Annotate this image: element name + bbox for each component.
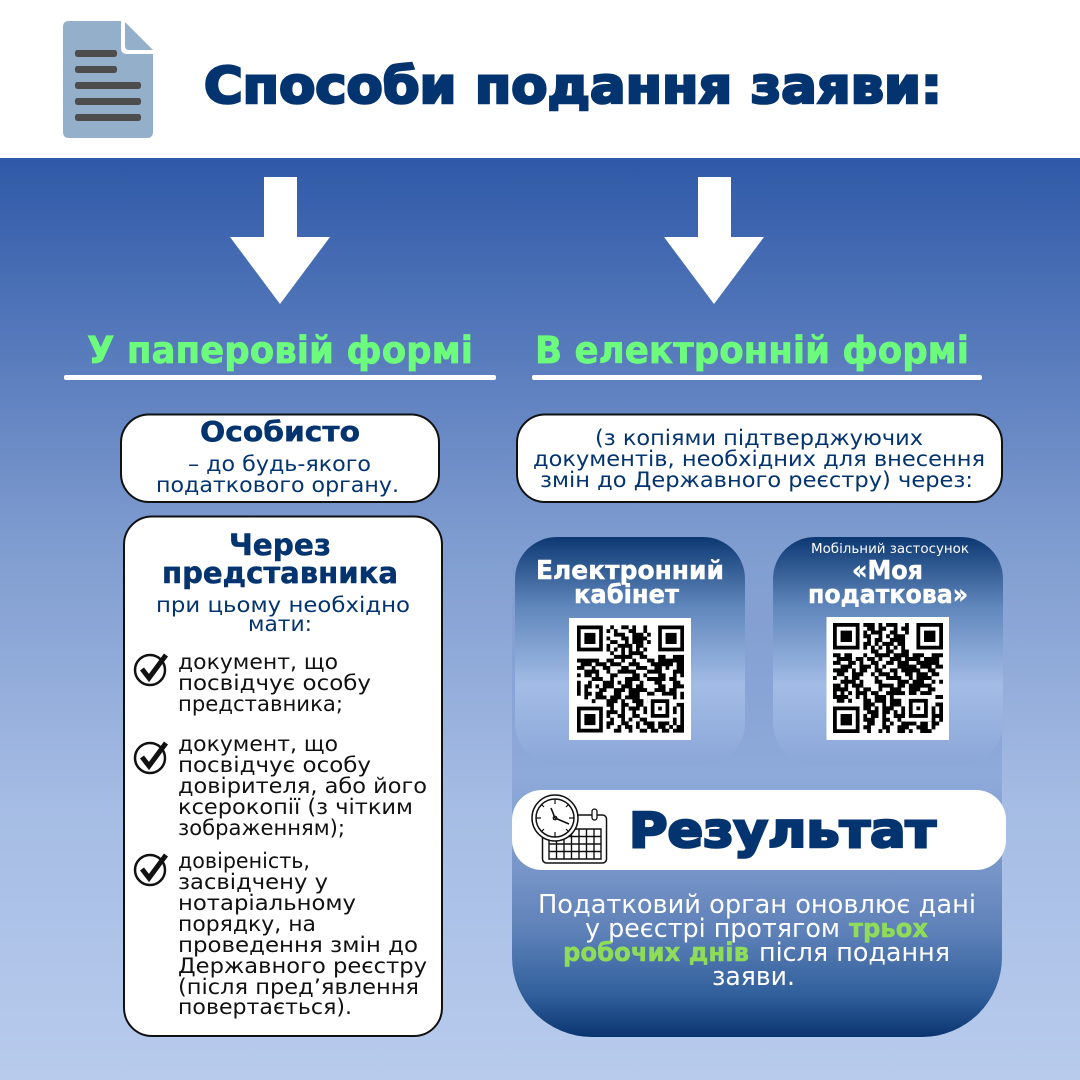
arrow: right column xyxy=(664,177,764,304)
panel: in person xyxy=(121,414,439,502)
item 2: зображенням); xyxy=(178,816,345,841)
item 1 xyxy=(178,650,371,717)
item 3: Державного реєстру xyxy=(178,954,427,979)
panel: via representative xyxy=(124,516,442,1036)
representative heading xyxy=(156,528,410,637)
icon: document xyxy=(63,21,153,138)
item 3: довіреність, xyxy=(178,849,310,874)
item 1: посвідчує особу xyxy=(178,671,371,696)
panel: electronic cabinet: кабінет xyxy=(574,580,679,610)
heading: paper form: У паперовій формі xyxy=(87,329,473,372)
panel: in person: податкового органу. xyxy=(156,473,399,498)
result description: після подання xyxy=(759,938,950,968)
item 3: проведення змін до xyxy=(178,933,418,958)
item 2: ксерокопії (з чітким xyxy=(178,795,413,820)
result description xyxy=(538,890,976,992)
item 2: документ, що xyxy=(178,732,338,757)
item 3 xyxy=(178,849,427,1020)
item 1: документ, що xyxy=(178,650,338,675)
icon: check 3 xyxy=(135,855,166,885)
representative heading: Через xyxy=(229,528,331,562)
result description: заяви. xyxy=(712,962,795,992)
item 1: представника; xyxy=(178,692,343,717)
result description: Податковий орган оновлює дані xyxy=(538,890,976,920)
panel: electronic cabinet: Електронний xyxy=(536,556,724,586)
item 2: довірителя, або його xyxy=(178,774,427,799)
panel: in person: Особисто xyxy=(200,416,360,448)
result heading: Результат xyxy=(629,803,936,859)
representative heading: при цьому необхідно xyxy=(156,593,410,618)
heading: electronic form: В електронній формі xyxy=(535,329,969,372)
panel: mobile app: Мобільний застосунок xyxy=(811,542,969,557)
result description: робочих днів xyxy=(563,938,749,968)
title: Способи подання заяви: xyxy=(204,57,942,115)
QR code: electronic cabinet xyxy=(569,618,691,740)
QR code: mobile app xyxy=(826,617,949,740)
panel: electronic note xyxy=(517,414,1002,502)
panel: electronic note: документів, необхідних для внесення xyxy=(533,447,985,472)
panel: mobile app xyxy=(773,537,1003,765)
icon: clock and calendar xyxy=(532,795,606,863)
result description: у реєстрі протягом xyxy=(585,914,840,944)
panel: result bar xyxy=(512,790,1006,870)
representative heading: представника xyxy=(162,556,398,590)
item 3: нотаріальному xyxy=(178,891,356,916)
representative heading: мати: xyxy=(248,612,312,637)
panel: mobile app: «Моя xyxy=(852,556,923,586)
item 2 xyxy=(178,732,427,841)
item 3: повертається). xyxy=(178,995,352,1020)
panel: mobile app: податкова» xyxy=(808,580,968,610)
result description: трьох xyxy=(849,914,928,944)
panel: electronic note: (з копіями підтверджуючих xyxy=(595,426,923,451)
header band xyxy=(0,0,1080,158)
panel: electronic note: змін до Державного реєстру) через: xyxy=(540,468,973,493)
panel: in person: – до будь-якого xyxy=(188,452,371,477)
item 3: засвідчену у xyxy=(178,870,328,895)
item 3: (після пред’явлення xyxy=(178,975,419,1000)
item 2: посвідчує особу xyxy=(178,753,371,778)
panel: electronic cabinet xyxy=(515,537,745,765)
item 3: порядку, на xyxy=(178,912,316,937)
arrow: left column xyxy=(230,177,330,304)
icon: check 2 xyxy=(135,743,166,773)
panel: result background xyxy=(512,520,1002,1037)
icon: check 1 xyxy=(135,655,166,685)
